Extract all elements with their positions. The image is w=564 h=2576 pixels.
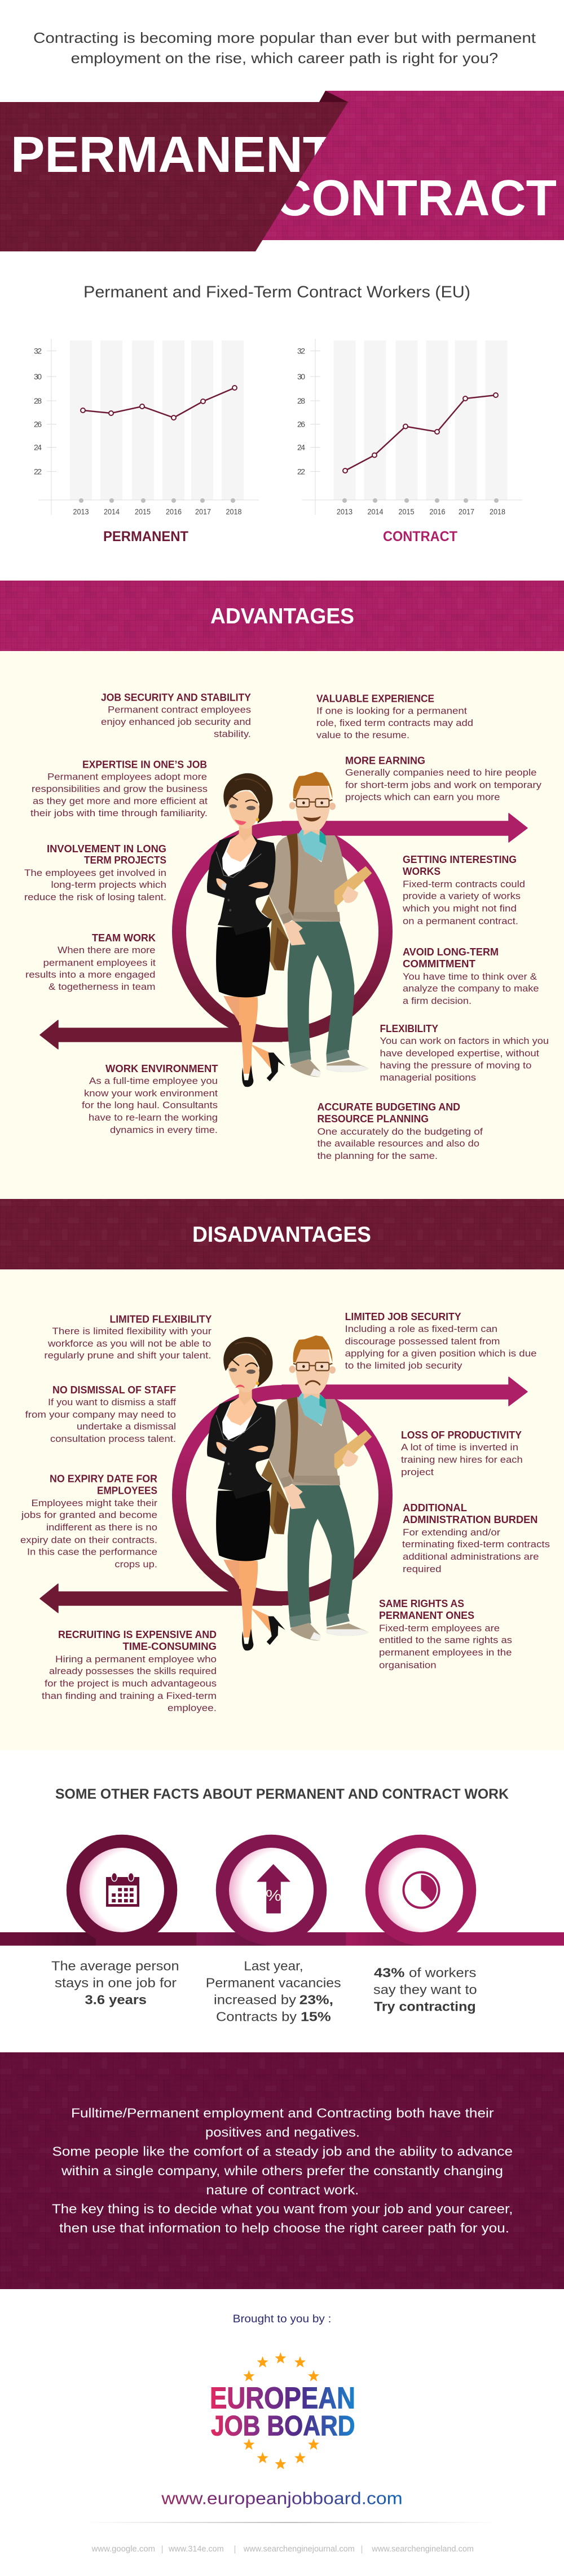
disadvantage: same rights as permanent ones: organisation: [379, 1661, 437, 1671]
advantage: expertise in one's job: [30, 759, 208, 818]
disadvantage: same rights as permanent ones: permanent employees in the: [379, 1648, 512, 1658]
line chart: permanent: 2018: [226, 507, 242, 516]
advantage: getting interesting works: on a permanent contract.: [403, 917, 518, 927]
line chart: contract: 30: [297, 372, 305, 381]
advantage: accurate budgeting and resource planning: the available resources and also do: [317, 1139, 479, 1149]
fact text: average stay: The average person: [51, 1959, 179, 1973]
advantage: expertise in one's job: Permanent employees adopt more: [47, 772, 207, 782]
advantage: expertise in one's job: their jobs with time through familiarity.: [30, 808, 208, 818]
advantage: job security and stability: stability.: [214, 729, 251, 740]
fact text: vacancies: Last year,: [244, 1959, 303, 1973]
sources line: www.314e.com: [168, 2544, 224, 2554]
disadvantage: additional administration burden: terminating fixed-term contracts: [402, 1539, 550, 1550]
disadvantage: additional administration burden: required: [403, 1564, 441, 1574]
line chart: permanent: 26: [34, 419, 42, 428]
advantage: avoid long-term commitment: a firm decision.: [403, 996, 472, 1006]
advantages ring and arrows: [40, 813, 527, 1049]
sources line: www.google.com: [91, 2544, 155, 2554]
conclusion panel: Fulltime/Permanent employment and Contracting both have their: [71, 2106, 494, 2121]
advantage: job security and stability: enjoy enhanced job security and: [101, 717, 251, 727]
illustration: man and woman smiling: [207, 772, 372, 1087]
conclusion panel: [0, 2052, 564, 2289]
cream panel backgrounds: [0, 651, 564, 1750]
hero banner: [0, 91, 564, 251]
line chart: permanent: 2013: [73, 507, 89, 516]
conclusion panel: positives and negatives.: [205, 2125, 360, 2140]
advantage: getting interesting works: GETTING INTERESTING: [403, 854, 517, 865]
icon: calendar: [106, 1873, 139, 1907]
disadvantage: no dismissal of staff: NO DISMISSAL OF STAFF: [52, 1384, 176, 1396]
line chart: contract: 2016: [430, 507, 446, 516]
disadvantage: loss of productivity: training new hires for each: [401, 1455, 523, 1465]
line chart: permanent: [34, 339, 259, 516]
disadvantage: no dismissal of staff: [25, 1384, 176, 1444]
disadvantage: recruiting is expensive and time-consuming: TIME-CONSUMING: [123, 1641, 217, 1652]
fact text: vacancies: 23%,: [299, 1993, 333, 2007]
line chart: contract: 2014: [368, 507, 384, 516]
conclusion panel: The key thing is to decide what you want from your job and your career,: [52, 2202, 513, 2216]
line chart: contract: 26: [297, 419, 305, 428]
line chart: contract: 2015: [398, 507, 415, 516]
disadvantage: loss of productivity: project: [401, 1467, 434, 1477]
brought to you by: Brought to you by :: [233, 2313, 331, 2325]
advantage: more earning: [345, 755, 542, 803]
advantage: involvement in long term projects: INVOLVEMENT IN LONG: [47, 843, 166, 855]
disadvantage: recruiting is expensive and time-consuming: RECRUITING IS EXPENSIVE AND: [58, 1629, 217, 1640]
icon: pie: [404, 1873, 439, 1907]
disadvantage: additional administration burden: ADMINISTRATION BURDEN: [403, 1514, 537, 1525]
disadvantage: no dismissal of staff: from your company may need to: [25, 1410, 176, 1420]
fact circle: percent arrow: [222, 1841, 320, 1939]
advantage: accurate budgeting and resource planning: RESOURCE PLANNING: [317, 1113, 429, 1125]
line chart: permanent: 2016: [166, 507, 182, 516]
advantage: expertise in one's job: responsibilities and grow the business: [32, 784, 208, 794]
facts heading: SOME OTHER FACTS ABOUT PERMANENT AND CONTRACT WORK: [55, 1786, 509, 1802]
advantage: valuable experience: value to the resume.: [316, 730, 409, 740]
advantage: flexibility: FLEXIBILITY: [380, 1023, 438, 1034]
chart label: contract: CONTRACT: [383, 529, 457, 545]
line chart: permanent: 30: [34, 372, 42, 381]
advantage: getting interesting works: Fixed-term contracts could: [403, 879, 525, 889]
line chart: contract: 22: [297, 467, 305, 476]
conclusion panel: nature of contract work.: [206, 2183, 359, 2197]
line chart: contract: 24: [297, 443, 305, 452]
disadvantage: no dismissal of staff: If you want to dismiss a staff: [48, 1397, 176, 1407]
disadvantage: same rights as permanent ones: entitled to the same rights as: [379, 1635, 512, 1645]
intro text: Contracting is becoming more popular than ever but with permanent: [33, 29, 536, 46]
facts ribbon: [0, 1932, 564, 1946]
disadvantage: additional administration burden: [402, 1502, 550, 1574]
advantage: valuable experience: If one is looking for a permanent: [316, 706, 467, 716]
advantage: getting interesting works: which you might not find: [402, 904, 517, 914]
disadvantage: loss of productivity: A lot of time is inverted in: [401, 1442, 518, 1453]
advantage: work environment: for the long haul. Consultants: [82, 1100, 218, 1110]
advantage: avoid long-term commitment: analyze the company to make: [403, 984, 539, 994]
disadvantage: limited job security: to the limited job security: [345, 1361, 462, 1371]
advantage: more earning: for short-term jobs and work on temporary: [345, 780, 542, 790]
disadvantage: no expiry date for employees: Employees might take their: [32, 1498, 158, 1508]
advantage: getting interesting works: WORKS: [403, 866, 440, 877]
advantages banner: [0, 581, 564, 651]
advantage: flexibility: managerial positions: [380, 1073, 476, 1083]
fact circle: calendar: [73, 1841, 170, 1939]
fact text: average stay: stays in one job for: [55, 1976, 177, 1990]
intro text: employment on the rise, which career path is right for you?: [71, 50, 498, 67]
disadvantage: no expiry date for employees: crops up.: [114, 1560, 157, 1570]
advantage: valuable experience: [316, 693, 473, 740]
advantage: avoid long-term commitment: AVOID LONG-TERM: [403, 946, 499, 958]
disadvantage: additional administration burden: For extending and/or: [403, 1528, 501, 1538]
line chart: permanent: 32: [34, 346, 42, 355]
line chart: contract: 2013: [337, 507, 352, 516]
disadvantage: no expiry date for employees: NO EXPIRY DATE FOR: [50, 1473, 157, 1485]
advantage: avoid long-term commitment: [403, 946, 539, 1006]
icon: arrow with percent: %: [266, 1887, 281, 1904]
advantage: work environment: As a full-time employee you: [89, 1076, 218, 1086]
advantage: involvement in long term projects: long-term projects which: [51, 880, 166, 890]
line chart: permanent: 2014: [104, 507, 120, 516]
disadvantage: limited job security: applying for a given position which is due: [345, 1349, 537, 1359]
advantage: expertise in one's job: as they get more and more efficient at: [33, 796, 208, 806]
disadvantage: recruiting is expensive and time-consuming: employee.: [168, 1703, 217, 1714]
advantage: involvement in long term projects: [24, 843, 166, 902]
disadvantage: limited job security: discourage possessed talent from: [345, 1336, 500, 1347]
line chart: permanent: 28: [34, 396, 42, 405]
advantage: flexibility: [380, 1023, 549, 1083]
advantage: flexibility: have developed expertise, without: [380, 1048, 539, 1059]
fact text: want to try contracting: of workers: [409, 1965, 476, 1980]
disadvantage: limited job security: LIMITED JOB SECURITY: [345, 1311, 461, 1322]
line chart: contract: [297, 339, 522, 516]
line chart: contract: 28: [297, 396, 305, 405]
logo: european job board: [210, 2352, 355, 2469]
conclusion panel: Some people like the comfort of a steady job and the ability to advance: [52, 2144, 513, 2159]
disadvantage: no expiry date for employees: [20, 1473, 158, 1570]
fact text: want to try contracting: [373, 1965, 477, 2013]
advantage: accurate budgeting and resource planning: the planning for the same.: [317, 1151, 438, 1161]
disadvantage: limited flexibility: regularly prune and shift your talent.: [44, 1351, 211, 1361]
fact text: vacancies: 15%: [301, 2010, 331, 2024]
advantage: more earning: projects which can earn you more: [345, 793, 500, 803]
line chart: permanent: 2015: [135, 507, 151, 516]
icon: arrow with percent: [257, 1865, 290, 1913]
disadvantage: additional administration burden: ADDITIONAL: [403, 1502, 467, 1513]
disadvantage: limited flexibility: workforce as you will not be able to: [47, 1339, 211, 1349]
disadvantage: no expiry date for employees: expiry date on their contracts.: [20, 1535, 157, 1545]
fact text: average stay: 3.6 years: [85, 1993, 147, 2007]
advantage: avoid long-term commitment: You have time to think over &: [403, 972, 537, 982]
chart label: permanent: PERMANENT: [103, 529, 188, 545]
advantage: flexibility: having the pressure of moving to: [380, 1061, 531, 1071]
line chart: contract: 32: [297, 346, 305, 355]
logo: european job board: JOB BOARD: [211, 2410, 355, 2442]
disadvantage: recruiting is expensive and time-consuming: already possesses the skills required: [49, 1666, 217, 1676]
disadvantage: loss of productivity: LOSS OF PRODUCTIVITY: [401, 1429, 522, 1441]
advantage: accurate budgeting and resource planning: One accurately do the budgeting of: [317, 1127, 483, 1137]
advantage: involvement in long term projects: TERM PROJECTS: [84, 855, 166, 866]
disadvantage: limited job security: Including a role as fixed-term can: [345, 1324, 497, 1334]
advantage: more earning: MORE EARNING: [345, 755, 425, 766]
website url: www.europeanjobboard.com: [161, 2489, 403, 2508]
fact text: want to try contracting: 43%: [374, 1965, 405, 1980]
disadvantage: recruiting is expensive and time-consuming: than finding and training a Fixed-term: [42, 1691, 217, 1701]
advantage: job security and stability: Permanent contract employees: [108, 705, 251, 715]
intro text: [33, 29, 536, 67]
sources line: www.searchenginejournal.com: [243, 2544, 355, 2554]
line chart: permanent: 24: [34, 443, 42, 452]
advantage: work environment: know your work environment: [84, 1088, 218, 1099]
advantage: job security and stability: [101, 692, 251, 740]
disadvantage: same rights as permanent ones: SAME RIGHTS AS: [379, 1598, 464, 1609]
disadvantage: recruiting is expensive and time-consuming: for the project is much advantageous: [45, 1679, 217, 1689]
advantage: expertise in one's job: EXPERTISE IN ONE’S JOB: [82, 759, 207, 770]
advantage: work environment: dynamics in every time.: [110, 1125, 218, 1135]
fact text: vacancies: increased by: [214, 1993, 297, 2007]
advantage: getting interesting works: provide a variety of works: [403, 891, 521, 901]
logo: european job board: EUROPEAN: [210, 2382, 355, 2415]
advantage: work environment: [82, 1063, 218, 1135]
fact text: want to try contracting: Try contracting: [374, 1999, 476, 2013]
line chart: contract: 2018: [490, 507, 505, 516]
disadvantage: same rights as permanent ones: Fixed-term employees are: [379, 1623, 500, 1634]
disadvantage: limited flexibility: LIMITED FLEXIBILITY: [109, 1313, 212, 1325]
advantage: involvement in long term projects: reduce the risk of losing talent.: [24, 892, 166, 902]
disadvantage: limited flexibility: There is limited flexibility with your: [52, 1326, 212, 1336]
disadvantage: no expiry date for employees: jobs for granted and become: [21, 1510, 157, 1520]
conclusion panel: within a single company, while others prefer the constantly changing: [61, 2163, 503, 2178]
sources line: [91, 2544, 474, 2554]
advantage: team work: & togetherness in team: [49, 982, 156, 992]
advantage: valuable experience: role, fixed term contracts may add: [316, 718, 473, 728]
hero word: permanent: PERMANENT: [11, 127, 334, 183]
disadvantages ring and arrows: [40, 1377, 527, 1613]
disadvantage: limited job security: [345, 1311, 537, 1371]
advantage: team work: results into a more engaged: [25, 970, 156, 980]
advantage: getting interesting works: [402, 854, 525, 927]
fact text: want to try contracting: say they want to: [373, 1982, 477, 1997]
disadvantage: no dismissal of staff: consultation process talent.: [50, 1434, 176, 1444]
advantage: team work: permanent employees it: [43, 958, 156, 968]
conclusion panel: then use that information to help choose the right career path for you.: [59, 2221, 509, 2236]
advantage: work environment: have to re-learn the working: [89, 1113, 218, 1123]
advantage: team work: When there are more: [58, 945, 156, 955]
disadvantage: recruiting is expensive and time-consuming: Hiring a permanent employee who: [55, 1654, 217, 1665]
disadvantage: no expiry date for employees: indifferent as there is no: [46, 1522, 157, 1533]
advantage: accurate budgeting and resource planning: [317, 1101, 483, 1161]
advantage: team work: [25, 932, 156, 992]
disadvantage: additional administration burden: additional administrations are: [403, 1552, 539, 1562]
disadvantages banner: DISADVANTAGES: [192, 1223, 371, 1247]
disadvantage: no dismissal of staff: undertake a dismissal: [77, 1422, 176, 1432]
line chart: permanent: 2017: [195, 507, 211, 516]
advantage: avoid long-term commitment: COMMITMENT: [403, 958, 475, 970]
advantage: involvement in long term projects: The employees get involved in: [24, 868, 166, 878]
disadvantage: limited flexibility: [44, 1313, 212, 1361]
illustration: man and woman frowning: [207, 1335, 372, 1650]
advantages banner: ADVANTAGES: [210, 604, 354, 628]
disadvantage: no expiry date for employees: EMPLOYEES: [97, 1485, 157, 1496]
advantage: accurate budgeting and resource planning: ACCURATE BUDGETING AND: [317, 1101, 460, 1113]
fact text: vacancies: [206, 1959, 341, 2024]
hero word: contract: CONTRACT: [275, 170, 557, 227]
advantage: team work: TEAM WORK: [92, 932, 156, 944]
fact text: vacancies: Permanent vacancies: [206, 1976, 341, 1990]
disadvantage: same rights as permanent ones: [379, 1598, 512, 1671]
sources line: www.searchengineland.com: [371, 2544, 474, 2554]
disadvantage: recruiting is expensive and time-consuming: [42, 1629, 217, 1714]
line chart: contract: 2017: [459, 507, 474, 516]
advantage: work environment: WORK ENVIRONMENT: [105, 1063, 218, 1074]
disadvantage: same rights as permanent ones: PERMANENT ONES: [379, 1610, 474, 1621]
fact text: average stay: [51, 1959, 179, 2007]
disadvantages banner: [0, 1199, 564, 1269]
fact text: vacancies: Contracts by: [216, 2010, 297, 2024]
disadvantage: loss of productivity: [401, 1429, 523, 1477]
disadvantage: no expiry date for employees: In this case the performance: [27, 1547, 157, 1557]
advantage: job security and stability: JOB SECURITY AND STABILITY: [101, 692, 251, 703]
advantage: more earning: Generally companies need to hire people: [345, 768, 537, 778]
line chart: permanent: 22: [34, 467, 42, 476]
advantage: valuable experience: VALUABLE EXPERIENCE: [316, 693, 434, 704]
advantage: flexibility: You can work on factors in which you: [380, 1036, 549, 1046]
chart section heading: Permanent and Fixed-Term Contract Workers (EU): [83, 283, 470, 301]
fact circle: pie clock: [372, 1841, 469, 1939]
